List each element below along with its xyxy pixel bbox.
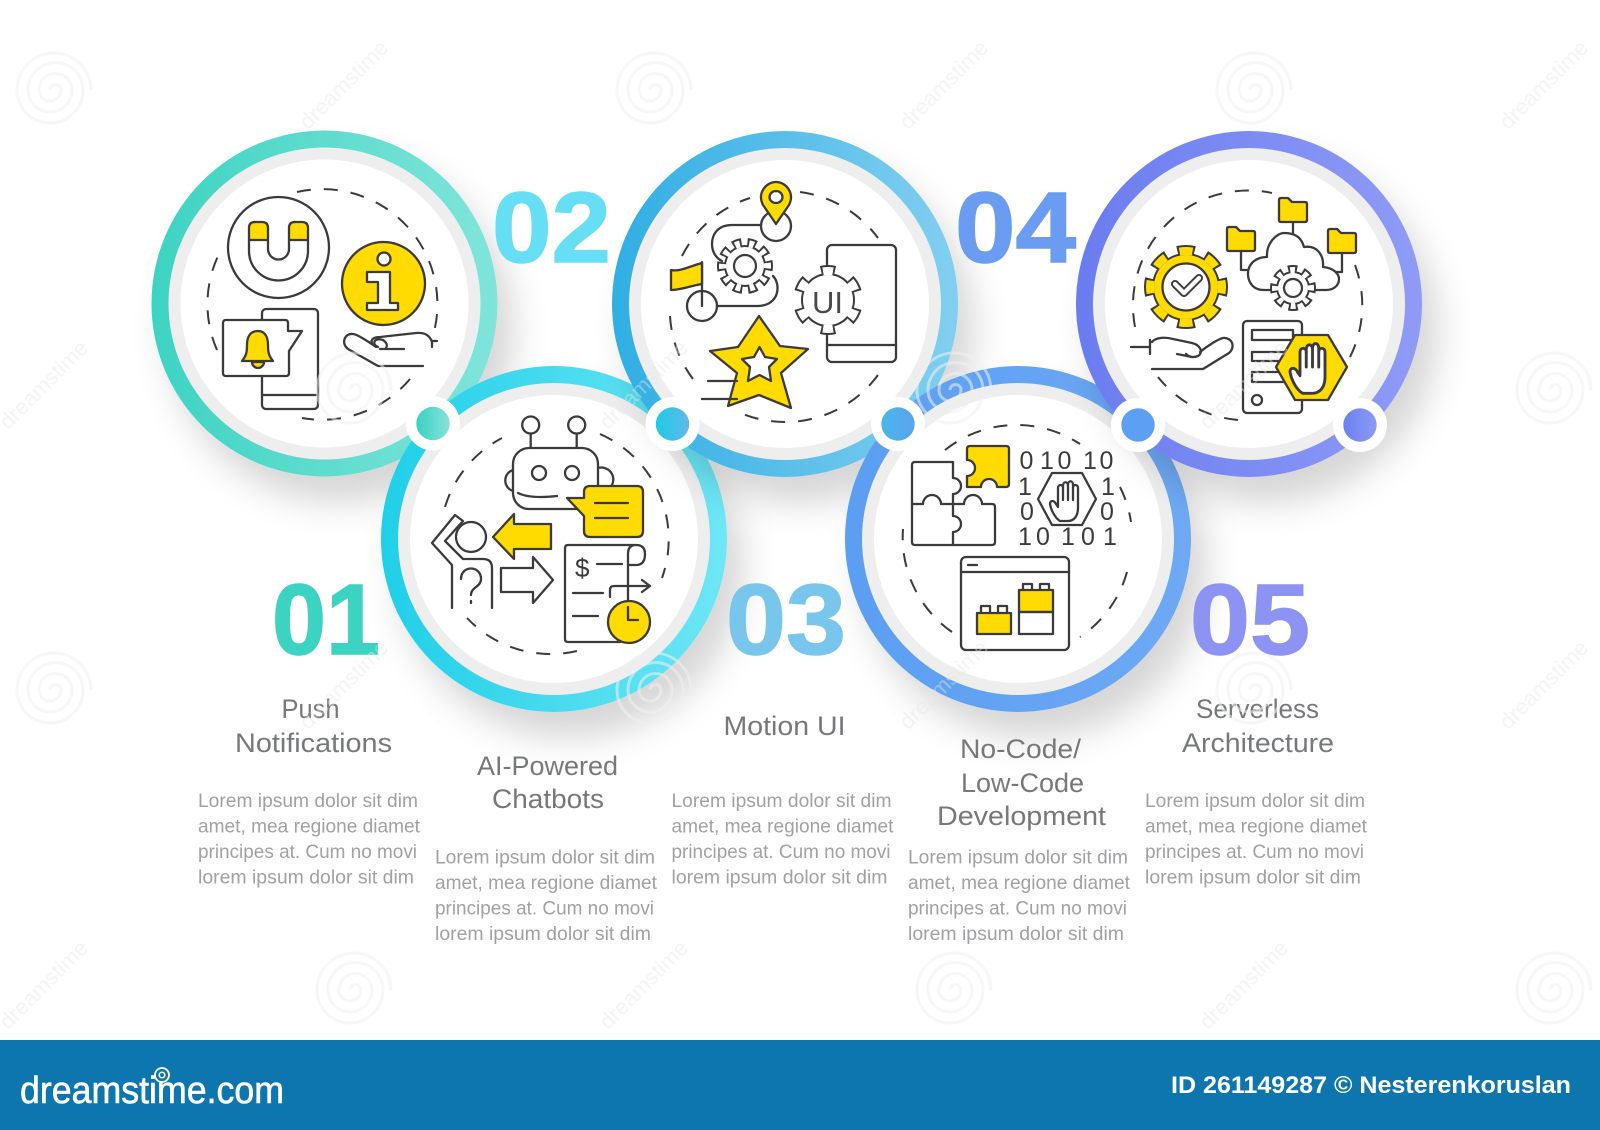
text block: step 2 description: principes at. Cum no movi [435, 898, 654, 920]
icon: binary code with stop hand: 01010 [1020, 447, 1113, 475]
text block: step 4 description: Lorem ipsum dolor sit dim [908, 846, 1128, 868]
footer logo: dreamstime.com [20, 1070, 284, 1112]
text block: step 4 description: lorem ipsum dolor sit dim [908, 923, 1124, 945]
heading: push notifications: Notifications [235, 728, 392, 758]
icon: open hand [344, 333, 437, 366]
text block: step 5 description: lorem ipsum dolor sit dim [1145, 866, 1361, 888]
number 01: 01 [272, 564, 380, 676]
text block: step 2 description [435, 846, 658, 945]
number 03: 03 [726, 564, 846, 676]
heading: serverless architecture: Serverless [1196, 694, 1319, 724]
infographic canvas: dreamstime [1194, 935, 1293, 1034]
heading: ai-powered chatbots: Chatbots [492, 784, 604, 814]
text block: step 2 description: amet, mea regione diamet [435, 872, 658, 894]
connector dot 1 [406, 396, 460, 450]
icon: binary code with stop hand: 00 [1020, 498, 1114, 526]
heading: no-code low-code development: No-Code/ [960, 734, 1082, 764]
icon: tablet with ui gear: UI [812, 285, 843, 320]
text block: step 4 description [908, 846, 1131, 945]
number 02: 02 [492, 172, 611, 284]
text block: step 3 description [672, 790, 894, 888]
text block: step 4 description: principes at. Cum no movi [908, 898, 1127, 920]
icon: server with stop hand [1243, 321, 1347, 413]
text block: step 5 description [1145, 790, 1368, 888]
icon: open hand [1131, 338, 1233, 369]
text block: step 5 description: Lorem ipsum dolor sit dim [1145, 790, 1365, 812]
text block: step 2 description: lorem ipsum dolor sit dim [435, 923, 651, 945]
heading: push notifications: Push [282, 694, 340, 724]
icon: yellow gear with check mark [1148, 250, 1224, 324]
icon: gear [721, 242, 769, 290]
heading: serverless architecture [1182, 694, 1334, 758]
panel: step 5 serverless architecture circle [1076, 131, 1422, 477]
footer credit: ID 261149287 © Nesterenkoruslan [1171, 1072, 1571, 1099]
text block: step 3 description: Lorem ipsum dolor sit dim [672, 790, 892, 812]
footer bar [0, 1040, 1600, 1130]
panel: step 2 ai-powered chatbots circle [381, 366, 727, 712]
infographic canvas: dreamstime [594, 335, 693, 434]
icon: tablet with ui gear [798, 245, 896, 362]
text block: step 1 description: principes at. Cum no movi [198, 841, 417, 863]
icon: binary code with stop hand: 10101 [1018, 523, 1117, 551]
text block: step 3 description: lorem ipsum dolor sit dim [672, 866, 888, 888]
text block: step 1 description [198, 790, 421, 888]
infographic canvas: dreamstime [594, 935, 693, 1034]
text block: step 2 description: Lorem ipsum dolor sit dim [435, 846, 655, 868]
icon label: dollar sign: $ [575, 553, 590, 583]
icon: info coin [342, 242, 425, 325]
text block: step 1 description: Lorem ipsum dolor sit dim [198, 790, 418, 812]
number 04: 04 [955, 172, 1076, 284]
panel: step 3 motion ui circle [612, 131, 958, 477]
text block: step 1 description: amet, mea regione diamet [198, 816, 421, 838]
heading: push notifications [235, 694, 392, 758]
text block: step 3 description: amet, mea regione diamet [672, 816, 894, 838]
text block: step 4 description: amet, mea regione diamet [908, 872, 1131, 894]
icon: phone with bell notification [223, 309, 318, 409]
heading: serverless architecture: Architecture [1182, 728, 1334, 758]
icon: confused person [432, 515, 492, 608]
icon: binary code with stop hand: 11 [1018, 473, 1115, 501]
text block: step 1 description: lorem ipsum dolor sit dim [198, 866, 414, 888]
text block: step 3 description: principes at. Cum no movi [672, 841, 890, 863]
panel: step 1 push notifications circle [152, 130, 498, 476]
icon: puzzle pieces [912, 446, 1009, 545]
icon: binary code with stop hand [1018, 447, 1117, 551]
icon: browser window with building blocks [961, 557, 1069, 650]
heading: ai-powered chatbots: AI-Powered [477, 751, 618, 781]
infographic canvas: dreamstime [1494, 35, 1593, 134]
icon: cloud with folders [1227, 198, 1356, 308]
icon: invoice with clock [565, 545, 650, 643]
panel: step 4 no-code low-code development circle [845, 366, 1191, 712]
infographic canvas: dreamstime [294, 35, 393, 134]
text block: step 5 description: principes at. Cum no movi [1145, 841, 1364, 863]
icon: yellow left arrow [493, 514, 551, 559]
connector dot 5 [1333, 398, 1387, 452]
connector dot 4 [1111, 398, 1165, 452]
infographic canvas: dreamstime [894, 35, 993, 134]
number 05: 05 [1190, 564, 1310, 676]
icon: magnet [228, 197, 329, 298]
text block: step 5 description: amet, mea regione diamet [1145, 816, 1368, 838]
heading: motion ui: Motion UI [724, 711, 846, 741]
icon: robot with chat bubble [505, 416, 643, 537]
icon: star with motion lines [702, 316, 808, 408]
icon: white right arrow [501, 557, 553, 603]
infographic canvas: dreamstime [1194, 335, 1293, 434]
connector dot 3 [871, 397, 925, 451]
connector dot 2 [646, 397, 700, 451]
infographic canvas: dreamstime [294, 635, 393, 734]
infographic canvas: dreamstime [1494, 635, 1593, 734]
heading: no-code low-code development: Low-Code [961, 768, 1084, 798]
icon: route with pin and flag [671, 182, 791, 321]
heading: no-code low-code development: Development [937, 801, 1107, 831]
infographic canvas: dreamstime [894, 635, 993, 734]
heading: no-code low-code development [937, 734, 1107, 831]
heading: ai-powered chatbots [477, 751, 618, 814]
